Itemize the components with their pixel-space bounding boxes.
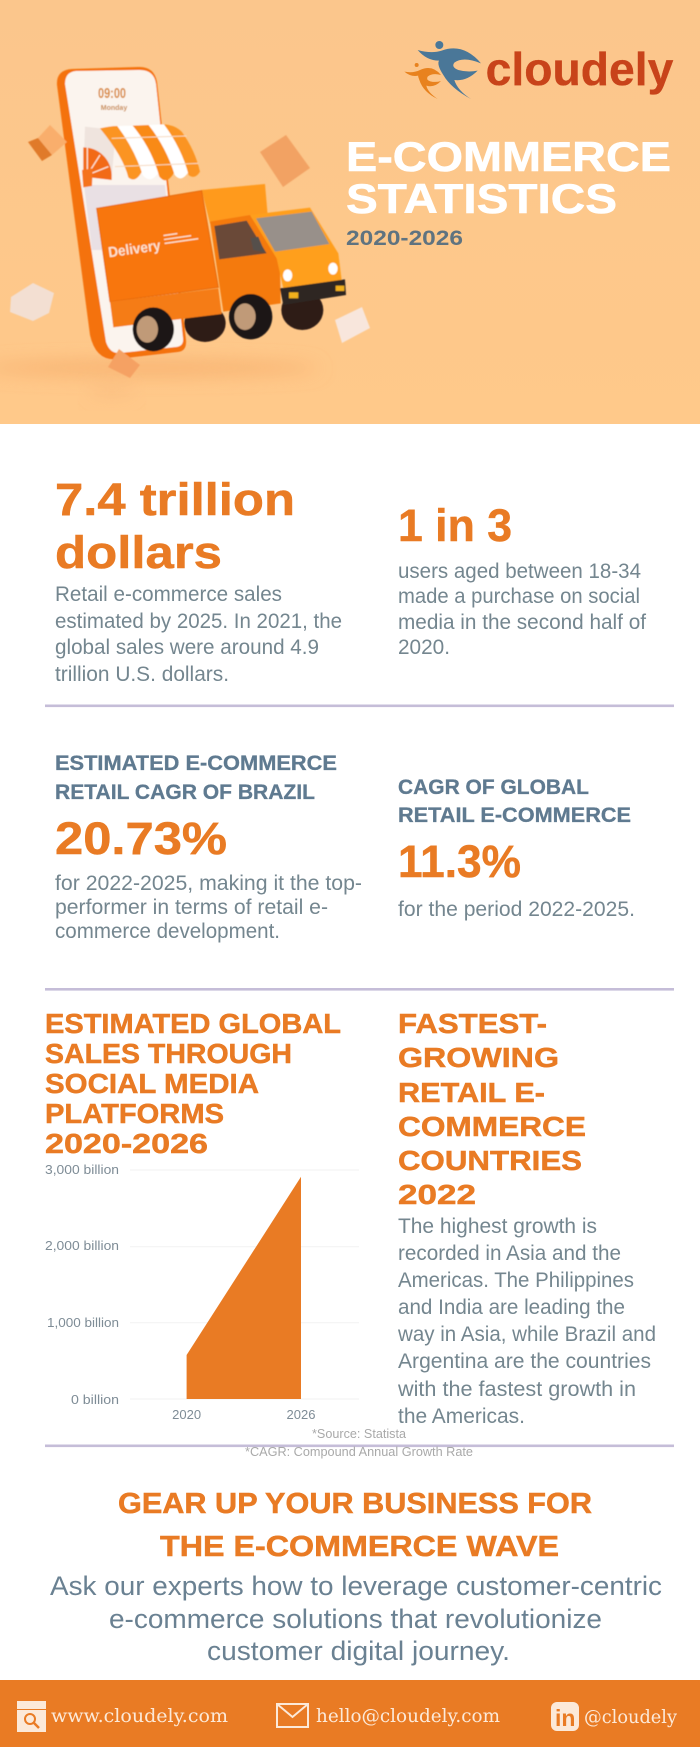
area chart: 3,000 billion [45,1162,119,1177]
icon: box bottom [108,349,140,378]
call to action text: customer digital journey. [207,1636,510,1666]
heading: social media sales: SOCIAL MEDIA [45,1068,259,1099]
panel: header [0,0,700,424]
stat: 1 in 3: media in the second half of [398,611,646,634]
call to action text: e-commerce solutions that revolutionize [109,1604,602,1634]
icon: linkedin: in [555,1705,575,1731]
stat: global CAGR: RETAIL E-COMMERCE [398,804,631,827]
stat: Brazil CAGR: RETAIL CAGR OF BRAZIL [55,781,315,804]
email text: hello@cloudely.com [316,1705,500,1727]
title [346,133,671,222]
panel: fastest-growing countries: the Americas. [398,1405,525,1428]
area chart: 2026 [287,1407,315,1422]
area chart: 0 billion [71,1392,119,1407]
heading: social media sales: SALES THROUGH [45,1038,292,1069]
subtitle: years: 2020-2026 [346,227,463,250]
area chart: 2,000 billion [45,1238,119,1253]
stat: 1 in 3: 2020. [398,636,450,659]
panel: fastest-growing countries: and India are leading the [398,1296,625,1319]
call to action text: Ask our experts how to leverage customer-centric [50,1571,662,1601]
stat: 1 in 3: 1 in 3 [398,500,512,551]
stat: global CAGR: CAGR OF GLOBAL [398,776,589,799]
call to action text [50,1571,662,1666]
linkedin handle: @cloudely [584,1706,677,1728]
footer bar [0,1680,700,1747]
heading: social media sales: 2020-2026 [45,1128,208,1159]
stat: 7.4 trillion dollars: 7.4 trillion [55,474,295,525]
area chart: 1,000 billion [47,1315,119,1330]
stat: Brazil CAGR: performer in terms of retail e- [55,896,328,919]
website text: www.cloudely.com [51,1705,228,1727]
truck label [107,231,200,261]
call to action heading: THE E-COMMERCE WAVE [160,1531,559,1563]
icon: envelope [277,1704,308,1727]
heading: social media sales [45,1008,341,1159]
call to action heading [118,1488,592,1563]
area chart [45,1162,359,1422]
panel: fastest-growing countries: 2022 [398,1179,476,1210]
panel: fastest-growing countries: way in Asia, while Brazil and [397,1323,656,1346]
stat: Brazil CAGR [55,752,362,943]
CAGR footnote: *CAGR: Compound Annual Growth Rate [245,1444,473,1459]
logo: cloudely [404,41,674,99]
call to action heading: GEAR UP YOUR BUSINESS FOR [118,1488,592,1520]
phone day: Monday [101,105,127,112]
panel: fastest-growing countries: recorded in Asia and the [398,1242,621,1265]
panel: fastest-growing countries: FASTEST- [398,1008,547,1039]
heading: social media sales: ESTIMATED GLOBAL [45,1008,341,1039]
stat: Brazil CAGR: for 2022-2025, making it the top- [55,872,362,895]
truck [97,184,346,351]
stat: 1 in 3: made a purchase on social [398,585,640,608]
heading: social media sales: PLATFORMS [45,1098,224,1129]
stat: 7.4 trillion dollars: global sales were around 4.9 [55,636,319,659]
icon: box right white [335,307,370,343]
panel: fastest-growing countries: COMMERCE [398,1111,586,1142]
stat: global CAGR [398,776,635,921]
icon: box left white [10,283,54,321]
stat: Brazil CAGR: 20.73% [55,813,227,864]
icon: website [17,1701,46,1732]
panel: fastest-growing countries: RETAIL E- [398,1077,545,1108]
stat: 7.4 trillion dollars [55,474,342,686]
stat: global CAGR: 11.3% [398,836,521,887]
panel: fastest-growing countries [397,1008,656,1428]
area chart: 2020 [172,1407,201,1422]
stat: Brazil CAGR: commerce development. [55,920,280,943]
icon: linkedin [551,1702,579,1731]
phone clock: 09:00 [98,85,126,102]
stat: 1 in 3: users aged between 18-34 [398,560,641,583]
icon: box left [28,125,67,161]
logo: cloudely: cloudely [486,43,674,95]
stat: 1 in 3 [398,500,646,659]
panel: fastest-growing countries: The highest growth is [398,1215,597,1238]
stat: 7.4 trillion dollars: estimated by 2025. In 2021, the [55,610,342,633]
panel: fastest-growing countries: with the fastest growth in [397,1378,636,1401]
source note: *Source: Statista [312,1426,407,1441]
stat: global CAGR: for the period 2022-2025. [398,898,635,921]
panel: fastest-growing countries: Argentina are the countries [398,1350,651,1373]
title: STATISTICS [346,175,617,222]
panel: fastest-growing countries: Americas. The Philippines [398,1269,634,1292]
panel: fastest-growing countries: GROWING [398,1042,559,1073]
stat: 7.4 trillion dollars: dollars [55,527,222,578]
illustration: phone and delivery truck [0,67,370,394]
icon: box right top [260,135,310,187]
stat: 7.4 trillion dollars: Retail e-commerce sales [55,583,282,606]
truck label: Delivery [107,238,162,261]
panel: fastest-growing countries: COUNTRIES [398,1145,582,1176]
stat: 7.4 trillion dollars: trillion U.S. dollars. [55,663,229,686]
title: E-COMMERCE [346,133,671,180]
icon: smartphone [57,67,186,359]
stat: Brazil CAGR: ESTIMATED E-COMMERCE [55,752,337,775]
icon: shop awning [82,124,200,187]
